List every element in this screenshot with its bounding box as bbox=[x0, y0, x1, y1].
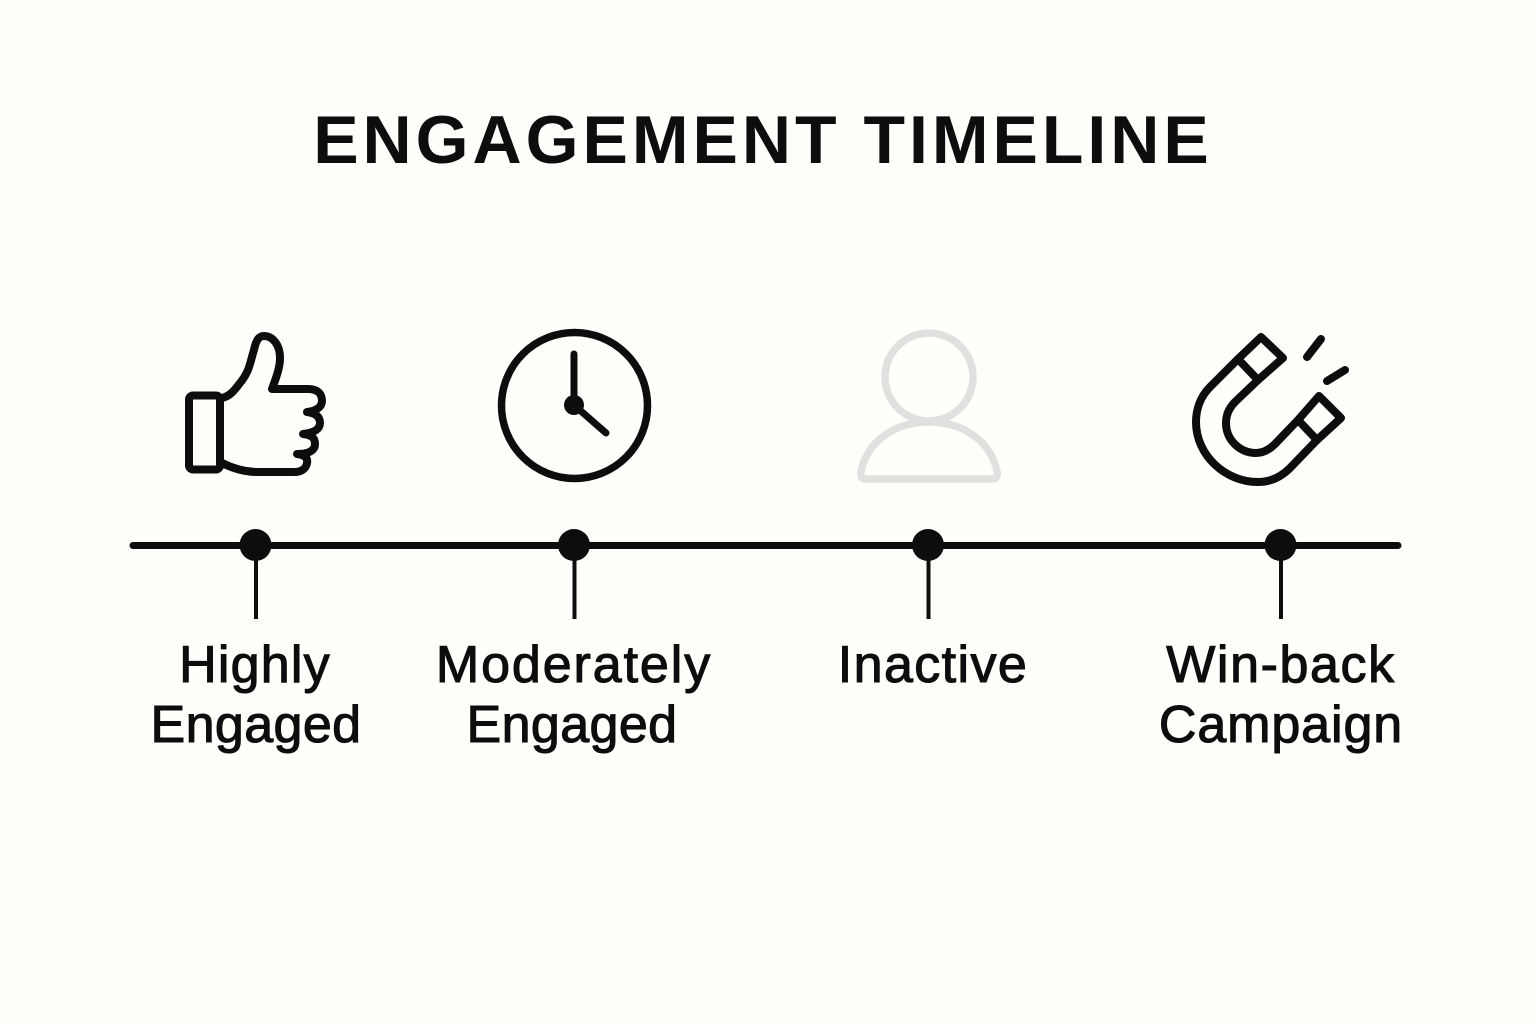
milestone: moderately engaged marker bbox=[558, 529, 590, 619]
icon: magnet bbox=[1196, 337, 1345, 482]
milestone: inactive marker bbox=[912, 529, 944, 619]
icon: thumbs up bbox=[189, 336, 322, 472]
icon: clock bbox=[502, 332, 648, 478]
label: win-back campaign: Win-back bbox=[1166, 636, 1396, 694]
title: ENGAGEMENT TIMELINE bbox=[313, 102, 1213, 178]
timeline axis bbox=[133, 542, 1398, 549]
label: moderately engaged: Moderately bbox=[436, 636, 712, 694]
label: highly engaged: Highly bbox=[179, 636, 331, 694]
label: inactive: Inactive bbox=[838, 636, 1028, 694]
milestone: highly engaged marker bbox=[240, 529, 272, 619]
label: moderately engaged: Engaged bbox=[466, 696, 678, 754]
label: win-back campaign: Campaign bbox=[1159, 696, 1403, 754]
label: highly engaged: Engaged bbox=[150, 696, 362, 754]
milestone: win-back marker bbox=[1264, 529, 1296, 619]
icon: person (inactive) bbox=[861, 333, 997, 479]
